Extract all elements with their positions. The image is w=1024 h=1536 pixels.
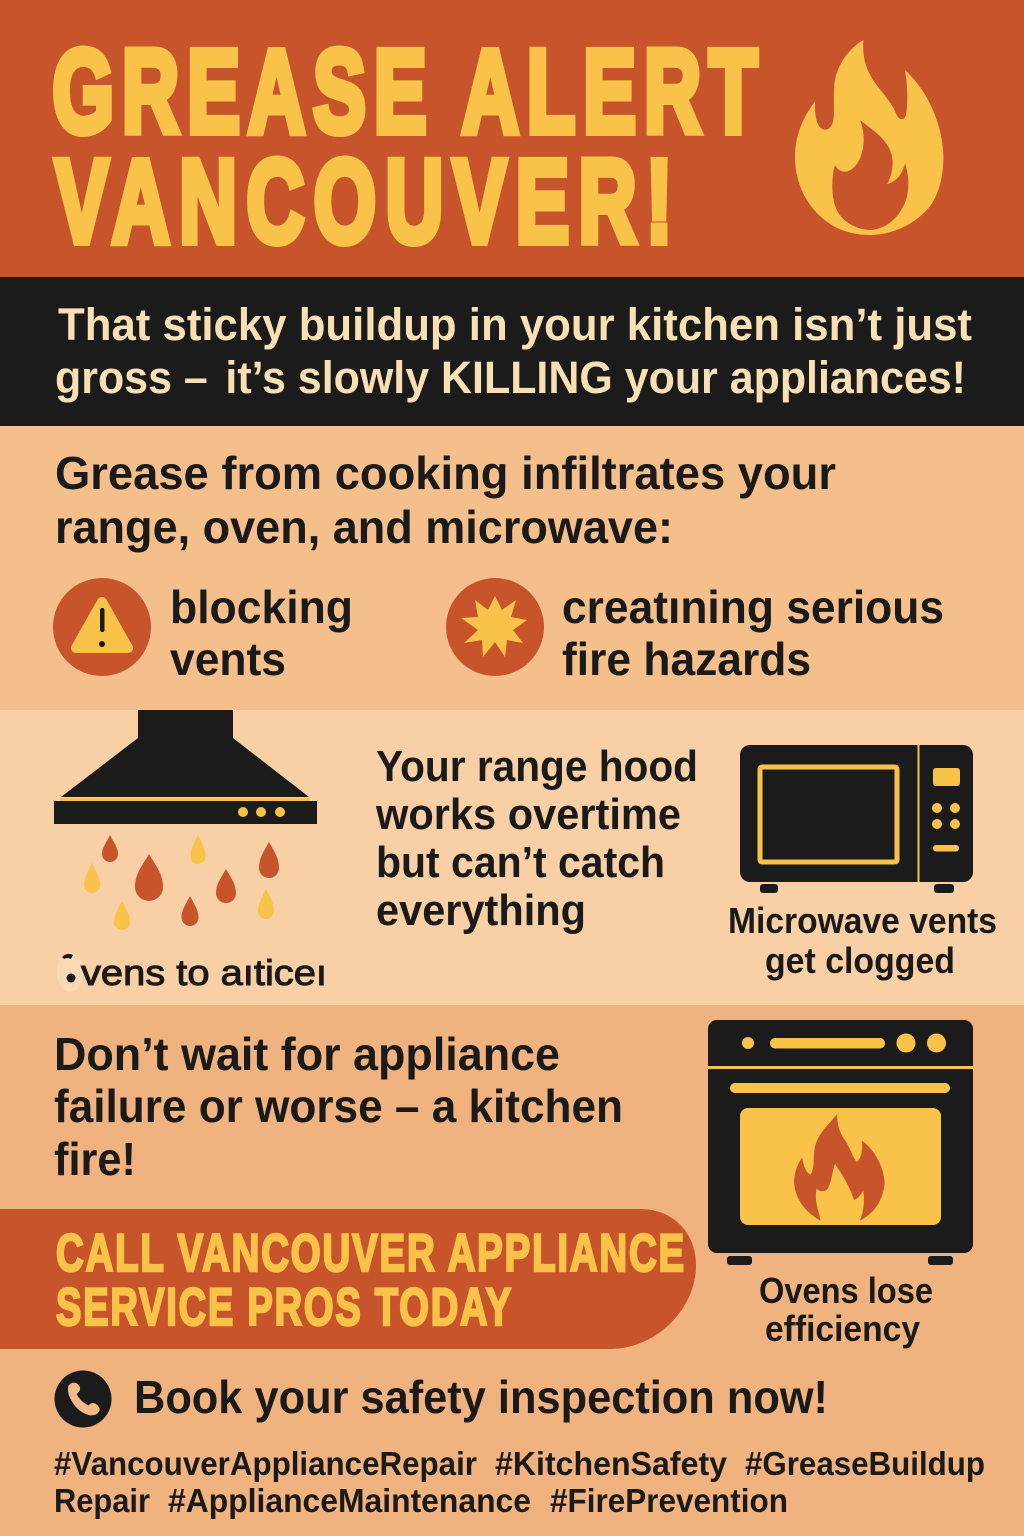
text: blocking vents: blocking [170,581,353,633]
text: range hood overtime: but can’t catch [376,838,665,887]
text: don't wait: fire! [54,1133,136,1185]
text: blocking vents: vents [170,633,286,685]
text: range hood overtime: everything [376,886,586,935]
callout: call to action: SERVICE PROS TODAY [56,1278,513,1337]
banner text: gross – it’s slowly KILLING your appliances! [55,352,966,403]
heading: Grease from cooking infiltrates your [55,447,836,499]
text: blocking vents [170,581,353,685]
callout: call to action: CALL VANCOUVER APPLIANCE [56,1224,686,1283]
callout: call to action [0,1209,696,1349]
text: range hood overtime [375,742,698,935]
icon: flame [795,40,943,235]
icon: phone [54,1370,112,1428]
caption: ovens lose efficiency [759,1270,933,1349]
text: don't wait [54,1028,623,1185]
text: fire hazards: fire hazards [562,633,811,685]
heading [55,447,836,553]
caption: ovens to article (smudged): vens to aıticeı [81,952,327,993]
caption: microwave vents: Microwave vents [728,900,997,941]
icon: microwave [740,745,973,893]
text: range hood overtime: works overtime [375,790,681,839]
banner text [55,299,972,403]
text: fire hazards [562,581,944,685]
panel: grease infiltrates [0,426,1024,710]
banner text: That sticky buildup in your kitchen isn’t just [58,299,972,350]
text: don't wait: failure or worse – a kitchen [54,1080,623,1132]
heading: range, oven, and microwave: [55,501,673,553]
hashtags: #GreaseBuildup [745,1445,985,1482]
panel: title header [0,0,1024,277]
caption: microwave vents: get clogged [765,940,955,981]
icon: oven [708,1020,973,1265]
icon: grease drops [84,835,279,930]
text: don't wait: Don’t wait for appliance [54,1028,560,1080]
panel: call to action section [0,1005,1024,1536]
text: fire hazards: creatıning serious [562,581,944,633]
hashtags: #VancouverApplianceRepair [54,1445,477,1482]
title [52,26,766,268]
icon: spark burst [446,578,544,676]
hashtags: #ApplianceMaintenance [168,1482,531,1519]
panel: warning banner [0,277,1024,426]
icon: range hood [54,710,317,824]
panel: range hood and microwave [0,710,1024,1005]
text: range hood overtime: Your range hood [376,742,698,791]
icon: warning triangle [53,578,151,676]
caption: microwave vents [728,900,997,981]
hashtags [54,1445,985,1519]
hashtags: #FirePrevention [550,1482,788,1519]
hashtags: #KitchenSafety [495,1445,728,1482]
caption: ovens lose efficiency: efficiency [765,1308,920,1349]
title: VANCOUVER! [55,136,682,268]
text: book inspection: Book your safety inspection now! [134,1371,828,1423]
hashtags: Repair [54,1482,150,1519]
caption: ovens lose efficiency: Ovens lose [759,1270,933,1311]
